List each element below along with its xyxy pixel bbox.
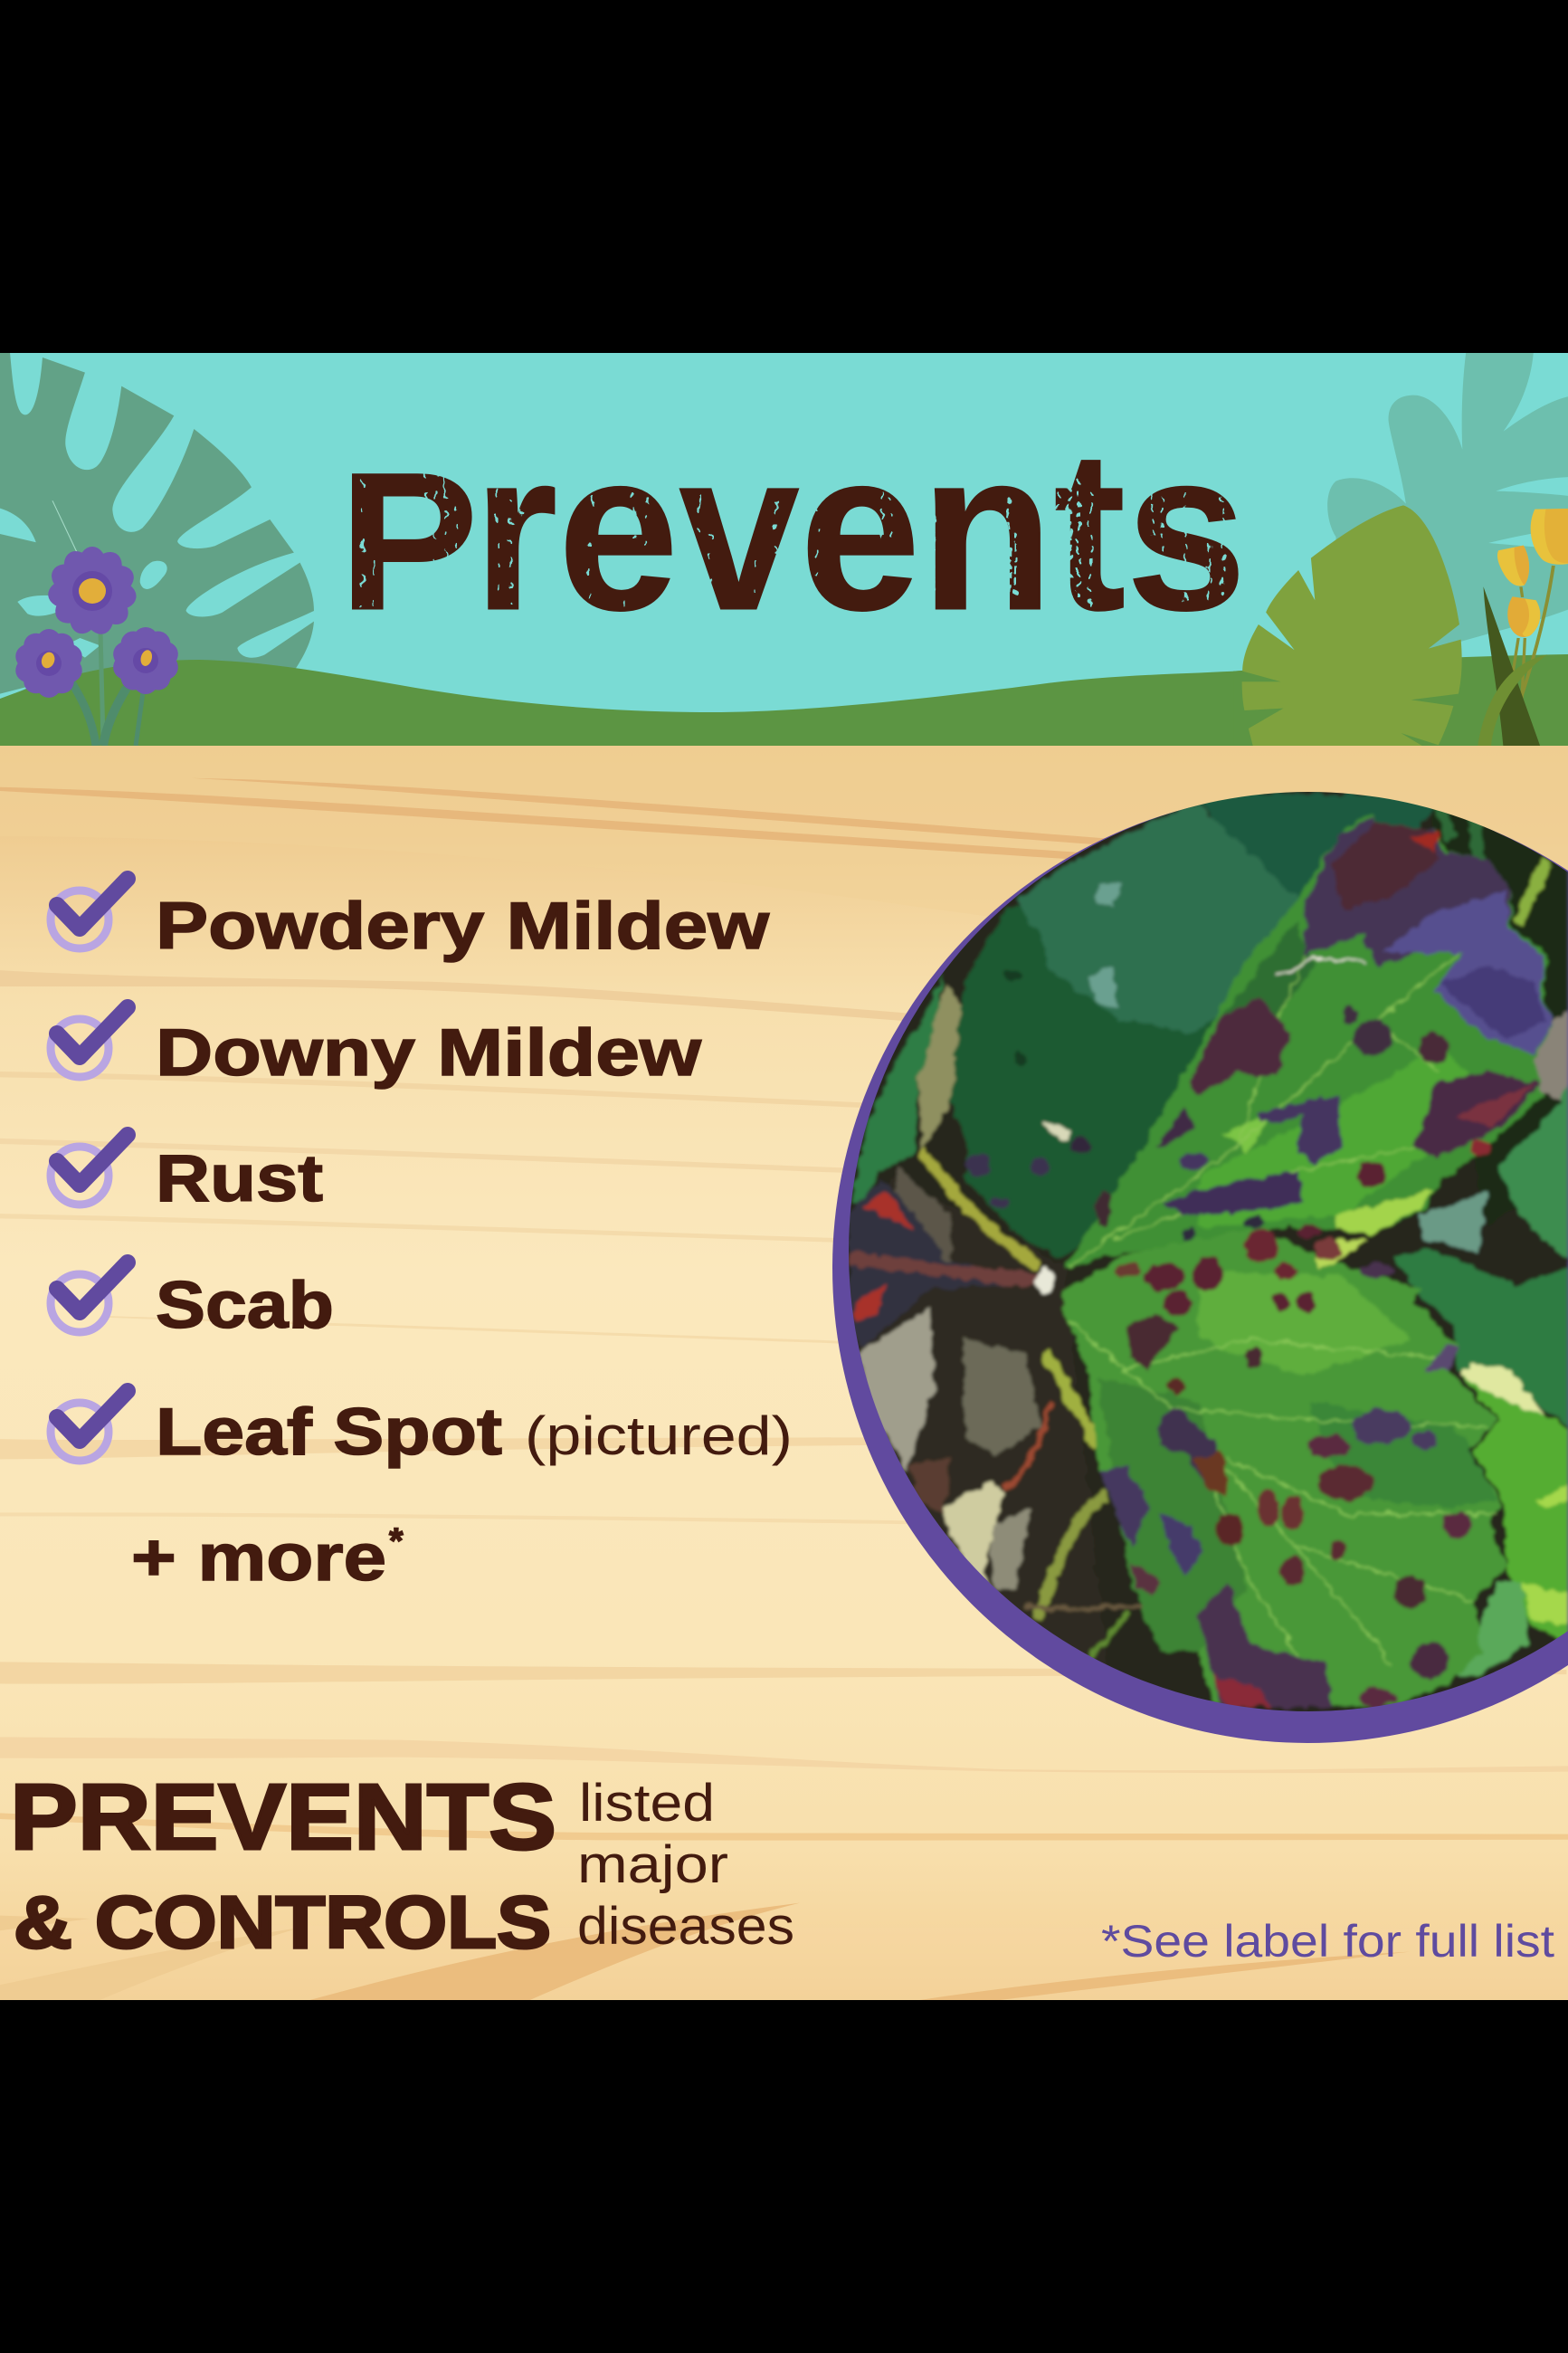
- icon: tulips: [1478, 509, 1568, 748]
- item: more: + more: [131, 1521, 386, 1595]
- photo top right background: [1430, 797, 1568, 1227]
- item: more: *: [389, 1521, 404, 1561]
- upper dark leaf: [1016, 791, 1440, 1034]
- hill: [0, 654, 1568, 746]
- icon: monstera leaf left: [0, 353, 314, 694]
- item: Powdery Mildew: Powdery Mildew: [156, 890, 769, 963]
- plants right: [1233, 353, 1568, 748]
- photo background ground: [860, 1166, 1144, 1660]
- icon: green leaf: [1242, 505, 1462, 748]
- flowers left: [12, 546, 182, 746]
- lower leaf lesions: [1100, 1228, 1472, 1707]
- tagline: prevents and controls: listed: [579, 1774, 715, 1833]
- wood grain lower: [0, 1737, 1568, 2021]
- lower leaf veins: [1069, 1320, 1497, 1695]
- title: P: [338, 432, 479, 651]
- tagline: prevents and controls: PREVENTS: [10, 1765, 556, 1869]
- title: revents: [473, 404, 1247, 658]
- item: Downy Mildew: Downy Mildew: [156, 1016, 701, 1090]
- item: Rust: Rust: [156, 1142, 323, 1215]
- item: Rust: [51, 1135, 323, 1215]
- wood tone shape top: [0, 746, 1568, 977]
- tagline: prevents and controls: major: [577, 1835, 728, 1894]
- tagline: prevents and controls: diseases: [577, 1897, 794, 1956]
- main upper leaf: [1064, 813, 1554, 1271]
- item: Leaf Spot: [51, 1391, 793, 1469]
- footnote: *See label for full list: [1101, 1916, 1554, 1967]
- flower right: [113, 627, 178, 694]
- title distress flecks: [362, 471, 1223, 606]
- upper leaf lesions: [1095, 815, 1554, 1241]
- item: Powdery Mildew: [51, 879, 769, 963]
- item: Scab: [51, 1262, 334, 1342]
- title: [352, 460, 1239, 612]
- item: Scab: Scab: [156, 1269, 334, 1342]
- checklist: [51, 879, 793, 1595]
- flower left: [15, 629, 82, 698]
- panel: wood background: [0, 746, 1568, 2021]
- stems: [849, 1152, 1041, 1280]
- infographic canvas: [0, 353, 1568, 2000]
- right side leaves: [1393, 1084, 1568, 1676]
- item: Leaf Spot: Leaf Spot: [156, 1396, 502, 1469]
- flower stems: [71, 632, 143, 746]
- icon: back leaf: [1327, 353, 1568, 648]
- main lower leaf: [1060, 1224, 1506, 1707]
- photo: diseased strawberry leaves: [849, 792, 1568, 1711]
- tagline: prevents and controls: [10, 1765, 794, 1964]
- panel: header banner: [0, 353, 1568, 748]
- flower top: [46, 546, 138, 638]
- middle dark leaf: [948, 903, 1214, 1260]
- left leaves: [849, 974, 1001, 1347]
- stem joint: [1035, 1267, 1055, 1294]
- tagline: prevents and controls: & CONTROLS: [14, 1881, 551, 1964]
- wood grain upper: [0, 778, 1104, 1242]
- photo circle border: [832, 793, 1568, 1743]
- item: Downy Mildew: [51, 1007, 701, 1090]
- wood grain middle: [0, 1316, 1566, 1684]
- upper leaf veins: [1069, 921, 1497, 1268]
- item: Leaf Spot: (pictured): [525, 1405, 793, 1466]
- hill overlap: [1233, 670, 1439, 746]
